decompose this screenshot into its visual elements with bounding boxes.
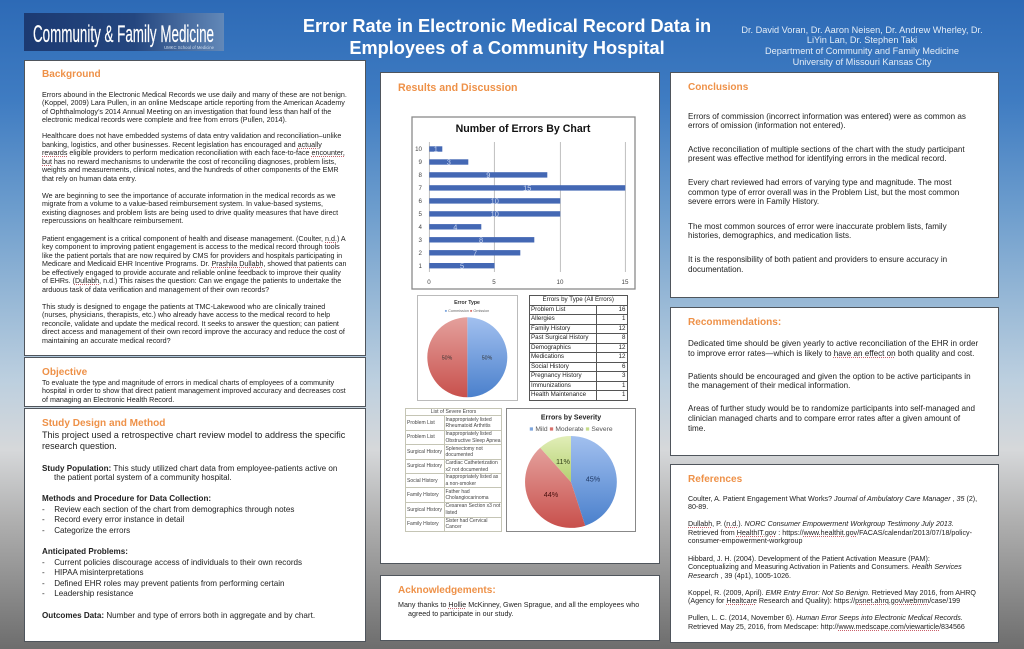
table: errors by type: Medications [531, 353, 564, 360]
text: objective: hospital in order to show that direct patient management improved accuracy and decreases cost [42, 387, 346, 395]
text: conclusion 5: It is the responsibility of both patient and providers to ensure accuracy in [688, 255, 947, 264]
text: acknowledgements [398, 601, 639, 618]
table: list of severe errors: Surgical History [407, 449, 442, 455]
panel: conclusions [670, 72, 999, 298]
table: list of severe errors: documented [446, 452, 473, 458]
table: errors by type: 12 [619, 353, 626, 360]
text: background paragraph 5: This study is designed to engage the patients at TMC-Lakewood who are clinically trained [42, 302, 325, 310]
text: background paragraph 1: (Koppel, 2009) Lara Pullen, in an online Medscape article reporting from the American Academy [42, 99, 345, 107]
table: list of severe errors: List of Severe Errors [431, 409, 476, 415]
table: errors by type: Demographics [531, 344, 571, 350]
text: background paragraph 5: maintaining an accurate medical record? [42, 336, 171, 344]
bar chart: number of errors by chart: 3 [447, 158, 451, 166]
text: reference 5: Pullen, L. C. (2014, November 6). Human Error Seeps into Electronic Medical Records. [688, 614, 963, 622]
text: recommendation 1: to improve error rates—which is likely to have an effect on both quality and cost. [688, 349, 974, 358]
table: errors by type: 3 [622, 372, 626, 379]
table: errors by type [529, 295, 628, 401]
bar chart: number of errors by chart: 2 [419, 250, 423, 257]
text: reference 2: Retrieved from HealthIT.gov : https://www.healthit.gov/FACAS/calendar/2013/07/18/policy- [688, 529, 972, 537]
text: background paragraph 4: Medicare and Medicaid EHR Incentive Programs. Dr. Prashila Dullabh, showed that patients can [42, 260, 346, 268]
bar chart: number of errors by chart: 10 [557, 279, 564, 286]
text: background paragraph 1: electronic medical records were complete and free from errors (Pullen, 2014). [42, 116, 287, 124]
text: methods and procedure: - Record every error instance in detail [42, 515, 184, 524]
text: background paragraph 2: Healthcare does not have embedded systems of data entry validation and reconciliation–unlike [42, 132, 341, 140]
text: reference 1: Coulter, A. Patient Engagement What Works? Journal of Ambulatory Care Manager , 35 (2), [688, 494, 977, 502]
text: anticipated problems [42, 547, 302, 598]
pie chart: errors by severity [506, 408, 636, 532]
table: list of severe errors: Sister had Cervical [446, 518, 487, 524]
table: list of severe errors: Obstructive Sleep Apnea [446, 438, 501, 444]
pie chart: error type [417, 295, 518, 401]
text: reference 1: 80-89. [688, 503, 708, 511]
panel: study design and method [24, 408, 366, 642]
text: study intro: This project used a retrospective chart review model to address the specific [42, 430, 345, 440]
table: list of severe errors: Family History [407, 521, 439, 527]
table: list of severe errors: listed [446, 510, 457, 516]
text: recommendation 2: the management of their medical information. [688, 381, 850, 390]
table: errors by type: 12 [619, 344, 626, 350]
table: errors by type: Pregnancy History [531, 372, 582, 379]
text: objective: of managing an Electronic Health Record. [42, 396, 174, 404]
authors: University of Missouri Kansas City [793, 57, 931, 67]
text: conclusion 1: errors of omission (information not entered). [688, 121, 845, 130]
text: reference 4: Koppel, R. (2009, April). EMR Entry Error: Not So Benign. Retrieved May 2016, from AHRQ [688, 588, 976, 596]
text: background paragraph 5: direct access and management of their own record improve the accuracy and reduce the cost of [42, 328, 345, 336]
text: background paragraph 2: that rely on human data entry. [42, 174, 136, 182]
bar chart: number of errors by chart: 0 [427, 279, 431, 286]
table: errors by type: 1 [622, 391, 626, 398]
table: list of severe errors: Father had [446, 489, 470, 495]
text: background paragraph 3: existing diagnoses and problem lists are being used to drive quality measures that have direct [42, 208, 338, 216]
table: errors by type: Past Surgical History [531, 334, 588, 341]
text: conclusion 5: documentation. [688, 264, 743, 274]
text: reference 2: consumer-empowerment-workgroup [688, 537, 802, 545]
bar chart: number of errors by chart: 5 [419, 211, 423, 218]
table: errors by type: Family History [531, 324, 570, 332]
table: list of severe errors: Cesarean Section x3 not [446, 503, 500, 509]
text: objective: To evaluate the type and magnitude of errors in medical charts of employees of a community [42, 378, 334, 386]
text: background paragraph 3: migrate from a volume to a value-based reimbursement system. In value-based systems, [42, 200, 323, 208]
text: reference 3: Research , 39 (4p1), 1005-1026. [688, 572, 791, 580]
text: outcomes data: Outcomes Data: Number and type of errors both in aggregate and by chart. [42, 611, 315, 620]
text: recommendation 3 [688, 404, 975, 433]
bar chart: number of errors by chart: 8 [419, 172, 423, 179]
table: errors by type: Health Maintenance [531, 391, 586, 398]
table: errors by type: 8 [622, 334, 626, 341]
panel: references [670, 464, 999, 643]
text: background paragraph 5: (nurses, physicians, therapists, etc.) who already have access to the medical record to help [42, 311, 330, 319]
text: background paragraph 4: Patient engagement is a critical component of health and disease management. (Coulter, n.d.) A [42, 234, 346, 242]
text: methods and procedure: Methods and Procedure for Data Collection: [42, 494, 211, 503]
text: recommendation 2: Patients should be encouraged and given the option to be active participants in [688, 372, 971, 380]
bar chart: number of errors by chart: 9 [419, 159, 423, 166]
bar chart: number of errors by chart: 1 [434, 144, 438, 154]
bar chart: number of errors by chart: 6 [419, 198, 423, 205]
title: Employees of a Community Hospital [349, 38, 665, 58]
bar chart: number of errors by chart: Number of Errors By Chart [456, 123, 591, 135]
text: background paragraph 2 [42, 132, 345, 182]
bar chart: number of errors by chart: 10 [415, 146, 423, 153]
text: reference 3: Hibbard, J. H. (2004). Development of the Patient Activation Measure (PAM): [688, 554, 930, 562]
text: background paragraph 1: Errors abound in the Electronic Medical Records we use daily and many of these are not benign. [42, 90, 347, 98]
table: list of severe errors: Splenectomy not [446, 446, 483, 452]
table: list of severe errors: Inappropriately listed [446, 431, 492, 437]
text: conclusion 2: Active reconciliation of multiple sections of the chart with the study participant [688, 144, 965, 154]
authors: Dr. David Voran, Dr. Aaron Neisen, Dr. Andrew Wherley, Dr. [741, 24, 983, 34]
text: study population: Study Population: This study utilized chart data from employee-patients active on [42, 464, 337, 472]
table: list of severe errors: Surgical History [407, 507, 442, 513]
heading: study design: Study Design and Method [42, 418, 165, 428]
pie chart: error type: 50% [442, 356, 453, 362]
bar chart: number of errors by chart: 7 [473, 248, 477, 257]
heading: recommendations: Recommendations: [688, 317, 781, 328]
bar chart: number of errors by chart: 10 [491, 210, 499, 218]
text: background paragraph 4: like the patient portals that are now required by CMS for providers and hospitals participating in [42, 252, 342, 260]
bar chart: number of errors by chart [411, 116, 636, 290]
text: background paragraph 1 [42, 90, 347, 124]
table: list of severe errors: Cardiac Catheterization [446, 460, 498, 466]
text: reference 2: Dullabh, P. (n.d.). NORC Consumer Empowerment Workgroup Testimony July 2013. [688, 520, 954, 528]
text: background paragraph 2: weights and measurements, clinical notes, and the hundreds of other components of the EMR [42, 166, 339, 174]
text: anticipated problems: - Defined EHR roles may prevent patients from performing certain [42, 579, 285, 588]
table: list of severe errors: Surgical History [407, 463, 442, 469]
table: errors by type: Allergies [531, 315, 555, 322]
panel: background [24, 60, 366, 356]
bar chart: number of errors by chart: 5 [460, 261, 464, 270]
text: background paragraph 4: arduous task of data verification and management of their own records? [42, 286, 269, 294]
text: background paragraph 5 [42, 302, 345, 344]
pie chart: errors by severity: Errors by Severity [541, 414, 601, 422]
pie chart: error type: Error Type [454, 300, 480, 306]
text: conclusion 1 [688, 112, 966, 130]
text: acknowledgements: Many thanks to Hollie McKinney, Gwen Sprague, and all the employees who [398, 601, 639, 609]
text: reference 3 [688, 554, 962, 580]
bar chart: number of errors by chart: 4 [453, 222, 457, 231]
table: list of severe errors: Problem List [407, 434, 435, 440]
table: list of severe errors [405, 408, 502, 532]
text: reference 4: (Agency for Healtcare Research and Quality): https://psnet.ahrq.gov/webmm/case/199 [688, 597, 960, 605]
text: reference 5 [688, 614, 965, 631]
table: errors by type: Immunizations [531, 382, 571, 388]
text: conclusion 4 [688, 222, 947, 240]
text: background paragraph 4 [42, 234, 346, 294]
heading: conclusions: Conclusions [688, 82, 748, 92]
text: conclusion 3: Every chart reviewed had errors of varying type and magnitude. The most [688, 178, 951, 187]
text: background paragraph 4: be effectively engaged to provide accurate and reliable online feedback to improve their quality [42, 268, 341, 276]
text: recommendation 3: time. [688, 424, 706, 433]
text: background paragraph 1: of Ophthalmology’s 2014 Annual Meeting on an investigation that found less than half of the [42, 108, 331, 116]
logo banner: UMKC School of Medicine [164, 45, 214, 50]
bar chart: number of errors by chart: 7 [419, 185, 423, 192]
text: reference 1 [688, 494, 977, 511]
bar chart: number of errors by chart: 15 [622, 279, 629, 286]
text: background paragraph 2: banking, logistics, and other businesses. Recent legislation has encouraged and actually [42, 140, 322, 148]
table: list of severe errors: Inappropriately listed as [446, 474, 498, 480]
text: background paragraph 4: of EHRs. (Dullabh, n.d.) This raises the question: Can we engage the patients to undertake the [42, 277, 341, 285]
table: list of severe errors: Problem List [407, 420, 435, 426]
text: conclusion 1: Errors of commission (incorrect information was entered) were as common as [688, 112, 966, 120]
text: reference 4 [688, 588, 976, 605]
table: errors by type: Problem List [531, 306, 565, 312]
table: list of severe errors: Inappropriately listed [446, 416, 492, 422]
panel: recommendations [670, 307, 999, 456]
text: methods and procedure: - Categorize the errors [42, 526, 130, 535]
table: list of severe errors: Family History [407, 492, 439, 498]
text: recommendation 1 [688, 339, 978, 358]
title: Error Rate in Electronic Medical Record Data in [303, 16, 711, 36]
text: anticipated problems: - Leadership resistance [42, 589, 133, 598]
text: conclusion 4: histories, demographics, and medication lists. [688, 231, 851, 240]
pie chart: error type: 50% [482, 356, 493, 362]
bar chart: number of errors by chart: 3 [419, 237, 423, 244]
text: methods and procedure: - Review each section of the chart from demographics through notes [42, 505, 294, 514]
text: recommendation 3: Areas of further study would be to randomize participants into self-managed and [688, 404, 975, 413]
text: background paragraph 3 [42, 192, 338, 225]
pie chart: error type: ■ Commission ■ Omission [445, 309, 489, 313]
text: conclusion 2 [688, 144, 965, 163]
table: errors by type: Social History [531, 362, 569, 370]
heading: objective: Objective [42, 366, 87, 378]
table: errors by type: 12 [619, 324, 626, 332]
text: conclusion 2: present was effective method for identifying errors in the medical record. [688, 154, 947, 163]
bar chart: number of errors by chart: 15 [523, 184, 531, 192]
title [303, 16, 711, 58]
text: conclusion 5 [688, 255, 947, 274]
table: list of severe errors: Cholangiocarinoma [446, 495, 489, 501]
text: study population [42, 464, 337, 482]
text: background paragraph 4: key component to improving patient engagement is access to the medical record through tools [42, 243, 340, 251]
heading: references: References [688, 474, 742, 485]
text: conclusion 3: severe errors were in Family History. [688, 197, 819, 206]
table: errors by type: 1 [622, 382, 626, 388]
table: list of severe errors: Cancer [446, 524, 462, 530]
text: study intro: research question. [42, 441, 117, 451]
text: recommendation 1: Dedicated time should be given yearly to active reconciliation of the EHR in order [688, 339, 978, 348]
text: background paragraph 3: repercussions on healthcare reimbursement. [42, 217, 183, 225]
text: reference 3: Conceptualizing and Measuring Activation in Patients and Consumers. Health Services [688, 563, 962, 571]
pie chart: errors by severity: 44% [544, 490, 559, 499]
bar chart: number of errors by chart: 1 [419, 263, 423, 270]
text: conclusion 4: The most common sources of error were inaccurate problem lists, family [688, 222, 947, 230]
text: anticipated problems: - HIPAA misinterpretations [42, 568, 144, 577]
table: errors by type: 6 [622, 362, 626, 370]
table: errors by type: Errors by Type (All Errors) [543, 296, 614, 303]
text: background paragraph 2: rewards eligible providers to perform medication reconciliation with each face-to-face encounter, [42, 149, 345, 157]
table: list of severe errors: Social History [407, 478, 438, 484]
table: errors by type: 1 [622, 315, 626, 322]
heading: results: Results and Discussion [398, 82, 518, 94]
panel: objective [24, 357, 366, 407]
text: reference 5: Retrieved May 25, 2016, from Medscape: http://www.medscape.com/viewarticle/834566 [688, 623, 965, 631]
text: reference 2 [688, 520, 972, 545]
pie chart: errors by severity: 45% [586, 474, 601, 484]
pie chart: errors by severity: 11% [556, 457, 571, 466]
text: study population: the patient portal system of a community hospital. [54, 473, 232, 482]
table: list of severe errors: Rheumatoid Arthritis [446, 423, 491, 429]
text: objective [42, 378, 346, 404]
panel: acknowledgements [380, 575, 660, 641]
text: background paragraph 5: reconcile, validate and update the medical record. It seeks to answer the question; can patient [42, 320, 339, 328]
bar chart: number of errors by chart: 8 [479, 235, 483, 244]
text: recommendation 3: clinician managed charts and to compare error rates after a given amount of [688, 414, 960, 423]
text: study intro [42, 430, 345, 451]
bar chart: number of errors by chart: 9 [486, 170, 490, 180]
bar chart: number of errors by chart: 5 [492, 279, 496, 286]
table: errors by type: 16 [619, 306, 626, 312]
heading: background: Background [42, 69, 101, 80]
text: conclusion 3: common type of error overall was in the Problem List, but the most common [688, 188, 959, 197]
heading: acknowledgements: Acknowledgements: [398, 585, 496, 596]
authors: LiYin Lan, Dr. Stephen Taki [807, 35, 917, 45]
table: list of severe errors: x2 not documented [446, 467, 488, 473]
pie chart: errors by severity: ■ Mild ■ Moderate ■ Severe [529, 426, 613, 433]
authors [741, 24, 983, 67]
logo banner [24, 13, 224, 51]
text: conclusion 3 [688, 178, 959, 206]
text: acknowledgements: agreed to participate in our study. [408, 610, 513, 618]
text: anticipated problems: - Current policies discourage access of individuals to their own records [42, 558, 302, 567]
text: recommendation 2 [688, 372, 971, 390]
text: anticipated problems: Anticipated Problems: [42, 547, 128, 556]
authors: Department of Community and Family Medicine [765, 46, 959, 56]
text: background paragraph 3: We are beginning to see the importance of accurate information in the medical records as we [42, 192, 336, 200]
panel: results and discussion [380, 72, 660, 564]
bar chart: number of errors by chart: 4 [419, 224, 423, 231]
table: list of severe errors: a non-smoker [446, 481, 476, 487]
bar chart: number of errors by chart: 10 [491, 196, 499, 206]
text: background paragraph 2: but has no reward mechanisms to underwrite the cost of reconciling diagnoses, problem lists, [42, 158, 336, 166]
text: methods and procedure [42, 494, 294, 535]
